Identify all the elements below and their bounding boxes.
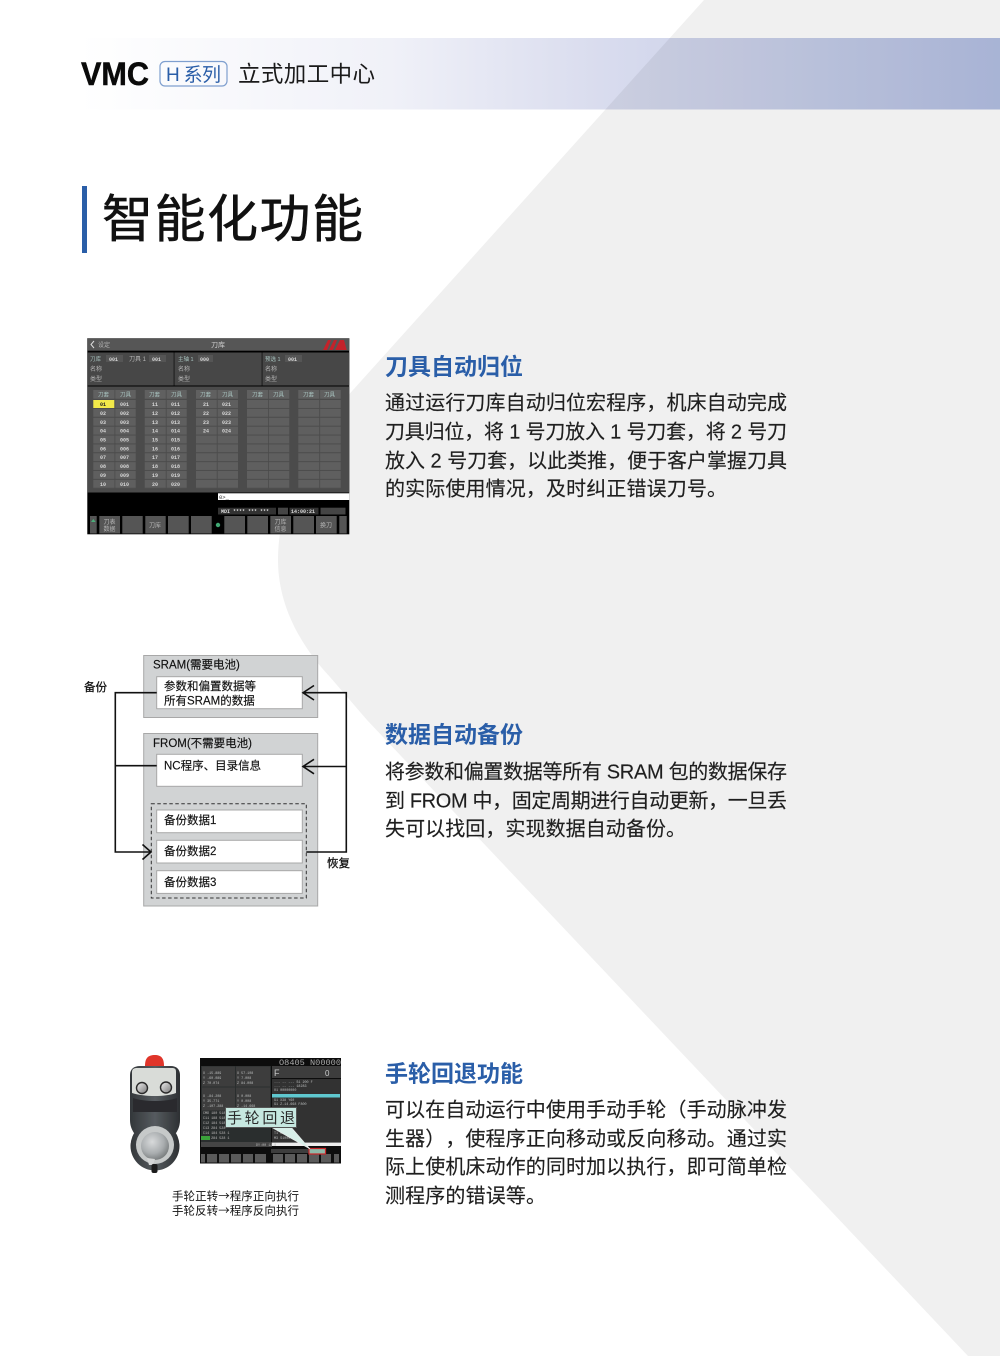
tool table: 刀具 <box>222 392 234 398</box>
tool table: 022 <box>222 411 231 417</box>
tool table: 014 <box>171 429 180 435</box>
tool table: 刀套 <box>98 390 110 398</box>
SRAM box: 所有SRAM的数据 <box>164 694 255 708</box>
axis data panels: Z 84.008 <box>237 1082 253 1086</box>
axis data panels <box>201 1066 341 1148</box>
caption: handwheel behaviour: 手轮正转→程序正向执行 <box>172 1188 299 1204</box>
tool table: 01 <box>100 402 106 408</box>
arrow: backup path <box>115 693 157 860</box>
axis data panels: Z -107.288 <box>203 1105 223 1109</box>
tool info row: 名称 <box>178 365 190 373</box>
panel: tool auto-return screen <box>87 338 349 534</box>
tool info row: 名称 <box>90 365 102 373</box>
axis data panels: C12 184 518 <box>203 1122 225 1126</box>
axis data panels: Z -14.668 <box>237 1105 255 1109</box>
label: restore: 恢复 <box>327 857 350 870</box>
tool table: 刀具 <box>324 392 336 398</box>
status row: 14:00:21 <box>291 509 315 515</box>
tool table: 020 <box>171 482 180 488</box>
tool table: 021 <box>222 402 231 408</box>
tool table: 017 <box>171 455 180 461</box>
tool table: 04 <box>100 429 106 435</box>
tool table: 18 <box>152 464 158 470</box>
soft keys <box>90 516 347 534</box>
FROM box <box>144 734 318 906</box>
status row: MDI **** *** *** <box>221 509 269 515</box>
tool table: 刀套 <box>149 390 161 398</box>
screen header: O8405 N00000 <box>279 1058 341 1068</box>
SRAM box: SRAM(需要电池) <box>153 658 240 672</box>
body text: 通过运行刀库自动归位宏程序，机床自动完成 <box>385 392 787 414</box>
body text: 到 FROM 中，固定周期进行自动更新，一旦丢 <box>385 790 787 812</box>
tool info row <box>87 352 349 386</box>
badge: H series: H 系列 <box>166 64 221 86</box>
axis data panels: CMD 180 518 <box>203 1112 225 1116</box>
screen title bar <box>87 338 349 351</box>
tool table: 007 <box>120 455 129 461</box>
body text <box>385 392 787 500</box>
axis data panels: Y 0.008 <box>237 1100 251 1104</box>
tool table: 07 <box>100 455 106 461</box>
tool table: 003 <box>120 420 129 426</box>
tool table: 024 <box>222 429 231 435</box>
panel: handwheel retract screen <box>200 1058 341 1164</box>
tool info row: 001 <box>152 357 161 363</box>
axis data panels: C13 284 528 <box>203 1127 225 1131</box>
text block: handwheel retract <box>385 1060 787 1208</box>
axis data panels: C11 188 518 <box>203 1117 225 1121</box>
axis data panels: G1 X38 Y60 <box>274 1099 294 1103</box>
axis data panels: 0 <box>325 1069 330 1078</box>
status row <box>218 508 346 515</box>
background grey shape <box>278 0 1000 1356</box>
tool info row: 刀库 <box>90 355 102 363</box>
tool table: 05 <box>100 438 106 444</box>
tool table: 20 <box>152 482 158 488</box>
header subtitle: 立式加工中心 <box>238 62 375 87</box>
tool table: 刀套 <box>200 390 212 398</box>
heading: 数据自动备份 <box>385 722 523 748</box>
tool table: 015 <box>171 438 180 444</box>
tool info row: 类型 <box>90 375 102 383</box>
callout: handwheel retract <box>226 1108 310 1149</box>
body text: 的实际使用情况，及时纠正错误刀号。 <box>385 478 727 500</box>
axis data panels: Y -60.089 <box>203 1077 221 1081</box>
axis data panels: Y 7.008 <box>237 1077 251 1081</box>
soft keys: 刀库 <box>274 518 287 526</box>
tool table: 013 <box>171 420 180 426</box>
body text <box>385 1098 787 1208</box>
tool table: 03 <box>100 420 106 426</box>
axis data panels: --- -- --- S1 200 F <box>274 1081 313 1085</box>
tool table: 009 <box>120 473 129 479</box>
header band <box>0 38 1000 110</box>
axis data panels: --- -- --- 18283 <box>274 1085 307 1089</box>
command input line <box>218 493 349 501</box>
tool info row: 001 <box>109 357 118 363</box>
panel: SRAM FROM backup diagram <box>84 656 350 906</box>
tool table: 023 <box>222 420 231 426</box>
soft keys <box>201 1154 339 1162</box>
tool table: 016 <box>171 446 180 452</box>
icon: handwheel pendant <box>130 1055 180 1173</box>
command input line: 0>_ <box>219 494 230 501</box>
tool table <box>87 386 349 492</box>
tool table: 14 <box>152 429 158 435</box>
tool table: 刀具 <box>171 392 183 398</box>
tool table: 02 <box>100 411 106 417</box>
FROM box: NC程序、目录信息 <box>164 758 261 772</box>
heading: 手轮回退功能 <box>385 1060 523 1086</box>
tool table: 16 <box>152 446 158 452</box>
heading: 刀具自动归位 <box>385 354 523 380</box>
FROM box: 备份数据2 <box>164 844 216 858</box>
axis data panels: F <box>274 1068 280 1078</box>
body text: 可以在自动运行中使用手动手轮（手动脉冲发 <box>385 1098 787 1122</box>
tool info row: 001 <box>288 357 297 363</box>
axis data panels: T1 M6 <box>274 1132 284 1136</box>
tool info row: 类型 <box>265 375 277 383</box>
tool info row: 名称 <box>265 365 277 373</box>
soft keys: 信息 <box>274 525 287 533</box>
tool table: 008 <box>120 464 129 470</box>
tool table: 012 <box>171 411 180 417</box>
soft keys: 数据 <box>104 525 116 533</box>
body text: 刀具归位，将 1 号刀放入 1 号刀套，将 2 号刀 <box>385 420 787 444</box>
screen title bar: 刀库 <box>211 340 225 349</box>
axis data panels: X 57.108 <box>237 1072 253 1076</box>
text block: data auto backup <box>385 722 787 840</box>
tool table: 12 <box>152 411 158 417</box>
caption: handwheel behaviour: 手轮反转→程序反向执行 <box>172 1202 299 1218</box>
SRAM box <box>144 656 318 718</box>
tool table: 24 <box>203 429 209 435</box>
tool table: 刀套 <box>252 390 264 398</box>
text block: tool auto-return <box>385 354 787 500</box>
tool table: 22 <box>203 411 209 417</box>
tool info row: 类型 <box>178 375 190 383</box>
tool table: 005 <box>120 438 129 444</box>
arrow: restore path <box>303 686 346 852</box>
body text: 测程序的错误等。 <box>385 1184 546 1208</box>
tool table: 刀具 <box>273 392 285 398</box>
axis data panels: Z 70.074 <box>203 1082 219 1086</box>
tool table: 006 <box>120 446 129 452</box>
tool table: 11 <box>152 402 158 408</box>
tool table: 018 <box>171 464 180 470</box>
soft keys: 刀库 <box>149 522 161 530</box>
tool table: 001 <box>120 402 129 408</box>
tool table: 17 <box>152 455 158 461</box>
tool table: 刀具 <box>120 392 132 398</box>
tool table: 15 <box>152 438 158 444</box>
label: backup: 备份 <box>84 680 107 694</box>
SRAM box: 参数和偏置数据等 <box>164 679 256 693</box>
body text: 生器），使程序正向移动或反向移动。通过实 <box>385 1128 787 1150</box>
soft keys: 换刀 <box>320 522 332 530</box>
axis data panels: M3 S1000 <box>274 1137 290 1141</box>
FROM box: 备份数据3 <box>164 875 216 889</box>
body text: 将参数和偏置数据等所有 SRAM 包的数据保存 <box>385 760 787 784</box>
tool table: 09 <box>100 473 106 479</box>
axis data panels: Y 35.771 <box>203 1100 219 1104</box>
axis data panels: C15 284 528 1 <box>203 1137 229 1141</box>
body text: 失可以找回，实现数据自动备份。 <box>385 818 686 840</box>
body text: 放入 2 号刀套，以此类推，便于客户掌握刀具 <box>385 450 787 472</box>
callout: handwheel retract: 手轮回退 <box>227 1110 295 1127</box>
tool info row: 000 <box>200 357 209 363</box>
tool table: 002 <box>120 411 129 417</box>
tool table: 011 <box>171 402 180 408</box>
tool table: 21 <box>203 402 209 408</box>
body text <box>385 760 787 840</box>
axis data panels: DY:00 12.8 <box>256 1144 276 1148</box>
FROM box: 备份数据1 <box>164 813 216 827</box>
axis data panels: X -84.208 <box>203 1095 221 1099</box>
screen title bar: 设定 <box>98 341 110 349</box>
status strip with highlight <box>271 1148 326 1154</box>
tool table: 19 <box>152 473 158 479</box>
tool table: 004 <box>120 429 129 435</box>
axis data panels: X -15.889 <box>203 1072 221 1076</box>
tool table: 10 <box>100 482 106 488</box>
tool table: 08 <box>100 464 106 470</box>
tool table: 刀套 <box>303 390 315 398</box>
axis data panels: O1 00000000 <box>274 1089 296 1093</box>
axis data panels: C14 184 528 1 <box>203 1132 229 1136</box>
tool info row: 预选 1 <box>265 355 281 363</box>
axis data panels: X 0.008 <box>237 1095 251 1099</box>
brand VMC: VMC <box>81 56 149 92</box>
tool table: 019 <box>171 473 180 479</box>
page title: 智能化功能 <box>102 191 363 248</box>
tool table: 06 <box>100 446 106 452</box>
soft keys: 刀表 <box>104 518 116 526</box>
tool info row: 主轴 1 <box>178 355 194 363</box>
tool table: 23 <box>203 420 209 426</box>
FROM box: FROM(不需要电池) <box>153 737 252 750</box>
tool info row: 刀具 1 <box>129 356 147 363</box>
body text: 际上使机床动作的同时加以执行，即可简单检 <box>385 1156 787 1178</box>
axis data panels: G1 Z-14.668 F800 <box>274 1103 307 1107</box>
caption: handwheel behaviour <box>172 1188 299 1218</box>
tool table: 13 <box>152 420 158 426</box>
tool table: 010 <box>120 482 129 488</box>
